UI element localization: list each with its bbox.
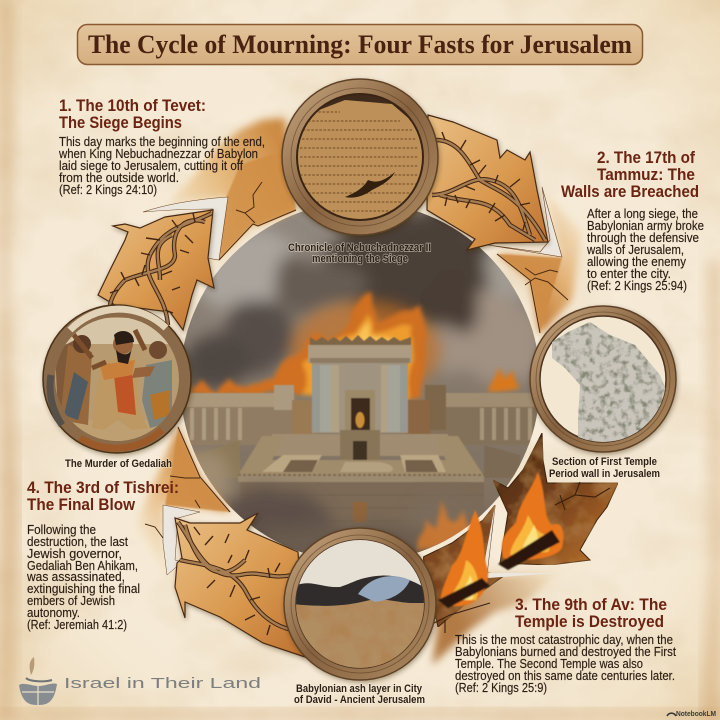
caption: wall: Period wall in Jerusalem	[549, 468, 660, 480]
smoke sky	[183, 211, 538, 553]
inner court sections	[292, 400, 316, 435]
heading 2: 2. The 17th of	[597, 149, 695, 167]
clay tablet	[295, 100, 424, 222]
soil strata	[296, 540, 424, 668]
white gap arrow	[143, 197, 228, 260]
body 2: allowing the enemy	[587, 255, 687, 269]
thorn arrow body	[427, 115, 548, 250]
body 1	[58, 135, 265, 197]
crack	[236, 182, 262, 223]
body 3: Babylonians burned and destroyed the First	[455, 645, 676, 659]
body 4: embers of Jewish	[27, 594, 115, 608]
body 2	[586, 207, 704, 293]
body 2: Babylonian army broke	[587, 219, 704, 233]
heading 1	[59, 97, 206, 132]
low smoke at base	[194, 448, 492, 553]
vine	[178, 522, 292, 635]
body 3: Temple. The Second Temple was also	[455, 657, 643, 671]
thorn arrow body	[98, 210, 214, 330]
faded tan tail	[432, 573, 557, 665]
ground flames	[418, 502, 470, 548]
cycle segment 3: burning arrow	[423, 433, 618, 665]
body 1: when King Nebuchadnezzar of Babylon	[58, 147, 258, 161]
body 4: destruction, the last	[27, 535, 128, 549]
white gap arrow	[482, 505, 557, 578]
text block 1: 10th of Tevet	[58, 97, 265, 197]
medallion: Babylonian chronicle tablet	[282, 79, 438, 235]
heading 4: The Final Blow	[27, 496, 135, 514]
caption: ash layer: of David - Ancient Jerusalem	[294, 694, 425, 706]
heading 2: Tammuz: The	[597, 166, 695, 184]
body 1: (Ref: 2 Kings 24:10)	[59, 183, 157, 197]
white gap arrow	[488, 187, 562, 257]
body 4: (Ref: Jeremiah 41:2)	[27, 618, 127, 632]
caption: chronicle	[288, 242, 431, 265]
cracks	[430, 482, 610, 633]
logo wordmark: Israel in Their Land	[64, 675, 261, 692]
painted figures	[56, 318, 172, 441]
title banner	[78, 24, 642, 64]
medallion: ash layer	[284, 528, 436, 680]
body 2: After a long siege, the	[587, 207, 698, 221]
vine	[432, 132, 545, 240]
vine	[110, 213, 212, 325]
heading 1: 1. The 10th of Tevet:	[59, 97, 206, 115]
central scene: burning temple	[183, 211, 538, 553]
medallion: murder of Gedaliah	[43, 305, 191, 453]
body 3: (Ref: 2 Kings 25:9)	[455, 681, 547, 695]
body 2: through the defensive	[587, 231, 699, 245]
golden ark	[356, 412, 364, 428]
flames behind temple	[190, 294, 522, 400]
heading 2	[561, 149, 699, 201]
lower burnt section	[423, 505, 505, 627]
heading 1: The Siege Begins	[59, 114, 182, 132]
heading 4: 4. The 3rd of Tishrei:	[27, 479, 179, 497]
heading 3: Temple is Destroyed	[515, 613, 664, 631]
crack	[145, 476, 200, 538]
body 3: This is the most catastrophic day, when the	[455, 633, 673, 647]
logo icon	[19, 657, 57, 705]
body 4	[26, 523, 140, 632]
crack	[525, 268, 568, 300]
caption: ash layer: Babylonian ash layer in City	[296, 683, 422, 695]
upper parchment	[136, 427, 230, 575]
caption: wall: Section of First Temple	[552, 456, 657, 468]
body 4: Jewish governor,	[27, 547, 122, 561]
body 4: Following the	[27, 523, 96, 537]
text block 2: 17th of Tammuz	[561, 149, 704, 293]
medallion: First Temple wall	[530, 306, 676, 452]
caption: ash layer	[294, 683, 425, 706]
body 4: was assassinated,	[26, 570, 125, 584]
text block 4: 3rd of Tishrei	[26, 479, 179, 632]
cycle segment 2: walls arrow	[427, 115, 582, 335]
thorn arrow body	[175, 513, 305, 657]
parchment tail	[165, 118, 296, 260]
front wall	[238, 475, 484, 482]
body 4: extinguishing the final	[27, 582, 140, 596]
cycle segment 4: final blow arrow	[136, 427, 305, 657]
heading 3: 3. The 9th of Av: The	[515, 596, 667, 614]
caption: murder: The Murder of Gedaliah	[65, 458, 172, 470]
body 4: Gedaliah Ben Ahikam,	[27, 559, 138, 573]
body 2: (Ref: 2 Kings 25:94)	[587, 279, 687, 293]
right colonnade	[430, 407, 536, 445]
upper flames and log	[498, 472, 564, 570]
white gap arrow	[163, 505, 200, 575]
text block 3: 9th of Av	[455, 596, 676, 695]
heading 4	[27, 479, 179, 514]
lower flames and log	[438, 510, 490, 608]
temple sanctuary	[308, 335, 412, 433]
body 1: from the outside world.	[59, 171, 179, 185]
caption: chronicle: mentioning the Siege	[312, 253, 408, 265]
body 1: laid siege to Jerusalem, cutting it off	[59, 159, 243, 173]
heading 3	[515, 596, 667, 631]
left colonnade	[186, 393, 296, 445]
body 2: walls of Jerusalem,	[586, 243, 684, 257]
caption: wall	[549, 456, 660, 480]
temple buildings	[186, 335, 536, 567]
body 3	[455, 633, 676, 695]
upper burnt section	[493, 433, 618, 565]
caption: chronicle: Chronicle of Nebuchadnezzar II	[288, 242, 431, 254]
body 3: destroyed on this same date centuries later.	[455, 669, 675, 683]
cycle segment 1: siege arrow	[98, 118, 296, 330]
limestone wall	[552, 322, 670, 445]
body 2: to enter the city.	[587, 267, 671, 281]
logo: Israel in Their Land	[19, 657, 261, 705]
body 4: autonomy.	[27, 606, 80, 620]
lower parchment	[497, 192, 582, 335]
title: The Cycle of Mourning: Four Fasts for Jerusalem	[88, 29, 632, 59]
body 1: This day marks the beginning of the end,	[59, 135, 265, 149]
heading 2: Walls are Breached	[561, 183, 699, 201]
lower terraces	[272, 434, 448, 456]
